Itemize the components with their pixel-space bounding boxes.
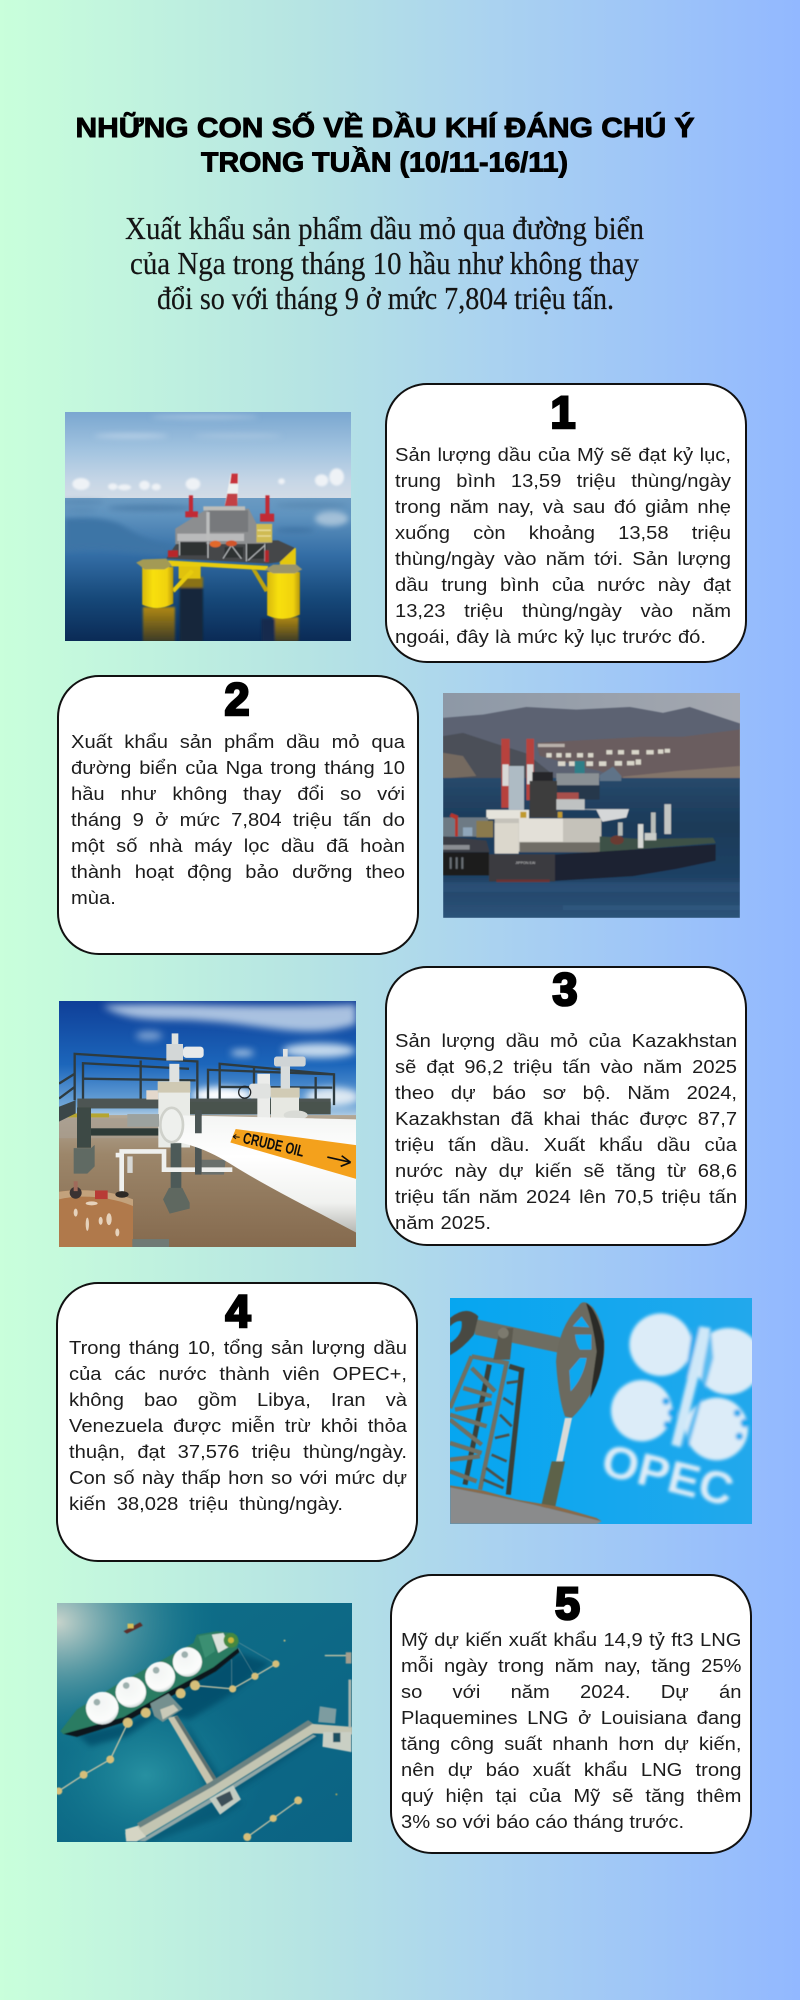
valve tower right — [271, 1089, 299, 1118]
text block 1: Sản lượng dầu của Mỹ sẽ đạt kỷ lục, — [395, 445, 731, 465]
image: offshore oil platform — [65, 412, 351, 641]
text block 3: triệu tấn dầu. Xuất khẩu dầu của — [395, 1135, 737, 1155]
text block 5: quý hiện tại của Mỹ sẽ tăng thêm — [400, 1786, 741, 1806]
number 2: 2 — [224, 674, 250, 725]
text block 5: Mỹ dự kiến xuất khẩu 14,9 tỷ ft3 LNG — [400, 1630, 741, 1650]
text block 5: tăng công suất nhanh hơn dự kiến, — [400, 1734, 741, 1754]
LNG domes — [86, 1647, 202, 1724]
text block 1: 13,23 triệu thùng/ngày vào năm — [395, 601, 731, 621]
text block 2: một số nhà máy lọc dầu đã hoàn — [71, 836, 405, 856]
text block 5: so với năm 2024. Dự án — [400, 1682, 741, 1702]
image: crude oil pipeline — [59, 1001, 746, 1247]
panel 2 — [57, 675, 419, 955]
image: LNG carrier at terminal — [57, 1603, 749, 1842]
image: pumpjack with OPEC logo — [450, 1298, 752, 1524]
number 1: 1 — [550, 387, 576, 438]
tank — [59, 1190, 133, 1247]
subtitle: đổi so với tháng 9 ở mức 7,804 triệu tấn. — [157, 280, 614, 316]
text block 4: không bao gồm Libya, Iran và — [69, 1390, 407, 1410]
text block 2: thành hoạt động bảo dưỡng theo — [71, 862, 405, 882]
loading towers — [501, 739, 510, 808]
text block 3 — [395, 1031, 737, 1233]
distant ships — [600, 767, 621, 781]
text block 4: thuận, đạt 37,576 triệu thùng/ngày. — [69, 1442, 407, 1462]
tug — [124, 1622, 143, 1634]
subtitle: của Nga trong tháng 10 hầu như không thay — [130, 245, 639, 281]
text block 4: của các nước thành viên OPEC+, — [69, 1364, 407, 1384]
mooring lines — [59, 1656, 346, 1837]
subtitle: Xuất khẩu sản phẩm dầu mỏ qua đường biển — [125, 210, 644, 246]
panel 3 — [385, 966, 747, 1246]
image: oil tanker at port: JIPPON EAI — [515, 861, 535, 865]
right platforms — [318, 1706, 336, 1723]
image: oil tanker at port — [443, 693, 740, 918]
number 4: 4 — [225, 1286, 251, 1337]
text block 3: Kazakhstan đã khai thác được 87,7 — [395, 1109, 737, 1129]
text block 4: kiến 38,028 triệu thùng/ngày. — [69, 1494, 343, 1514]
subtitle — [125, 210, 644, 316]
text block 3: triệu tấn năm 2024 lên 70,5 triệu tấn — [395, 1187, 737, 1207]
text block 5 — [400, 1630, 741, 1832]
cranes — [224, 474, 238, 505]
deck — [166, 540, 294, 564]
number 5: 5 — [555, 1578, 580, 1629]
hull — [60, 1631, 239, 1734]
text block 1: trung bình 13,59 triệu thùng/ngày — [395, 471, 731, 491]
text block 2: mùa. — [71, 888, 116, 908]
text block 4: Con số này thấp hơn so với mức dự — [69, 1468, 407, 1488]
image: pumpjack with OPEC logo: OPEC — [597, 1434, 739, 1516]
text block 5: mỗi ngày trong năm nay, tăng 25% — [400, 1656, 741, 1676]
text block 1: trong năm nay, và sau đó giảm nhẹ — [395, 497, 731, 517]
panel 1 — [385, 383, 747, 663]
hull — [555, 844, 716, 881]
text block 3: theo dự báo sơ bộ. Năm 2024, — [395, 1083, 737, 1103]
text block 2: hầu như không thay đổi so với — [71, 784, 405, 804]
text block 5: Plaquemines LNG ở Louisiana đang — [400, 1708, 741, 1728]
text block 1: thùng/ngày vào năm tới. Sản lượng — [395, 549, 731, 569]
text block 3: Sản lượng dầu mỏ của Kazakhstan — [395, 1031, 737, 1051]
pier — [443, 817, 488, 837]
small pipes — [171, 1143, 181, 1199]
text block 3: nước này dự kiến sẽ tăng từ 68,6 — [395, 1161, 737, 1181]
crude oil label: CRUDE OIL — [241, 1128, 306, 1160]
text block 2 — [71, 732, 405, 908]
text block 4: Venezuela được miễn trừ khỏi thỏa — [69, 1416, 407, 1436]
text block 2: Xuất khẩu sản phẩm dầu mỏ qua — [71, 732, 405, 752]
jetty — [168, 1716, 216, 1787]
text block 1: ngoái, đây là mức kỷ lục trước đó. — [395, 627, 706, 647]
text block 4 — [69, 1338, 407, 1514]
title: NHỮNG CON SỐ VỀ DẦU KHÍ ĐÁNG CHÚ Ý — [76, 111, 695, 143]
deck — [600, 836, 716, 852]
text block 1: xuống còn khoảng 13,58 triệu — [395, 523, 731, 543]
superstructure — [532, 772, 553, 782]
panel 4 — [56, 1282, 418, 1562]
main pipe — [169, 1115, 356, 1232]
title — [76, 111, 695, 178]
text block 1 — [395, 445, 731, 647]
title: TRONG TUẦN (10/11-16/11) — [201, 146, 568, 178]
text block 3: năm 2025. — [395, 1213, 491, 1233]
text block 3: sẽ đạt 96,2 triệu tấn vào năm 2025 — [395, 1057, 737, 1077]
text block 1: dầu trung bình của nước này đạt — [395, 575, 731, 595]
panel 5 — [390, 1574, 752, 1854]
text block 5: 3% so với báo cáo tháng trước. — [400, 1812, 684, 1832]
crude oil label — [230, 1128, 356, 1179]
number 3: 3 — [552, 964, 578, 1015]
text block 5: nên dự báo xuất khẩu LNG trong — [400, 1760, 741, 1780]
text block 4: Trong tháng 10, tổng sản lượng dầu — [69, 1338, 407, 1358]
valve tower left — [158, 1081, 190, 1147]
jetty head — [150, 1694, 183, 1722]
text block 2: tháng 9 ở mức 7,804 triệu tấn do — [71, 810, 405, 830]
text block 2: đường biển của Nga trong tháng 10 — [71, 758, 405, 778]
